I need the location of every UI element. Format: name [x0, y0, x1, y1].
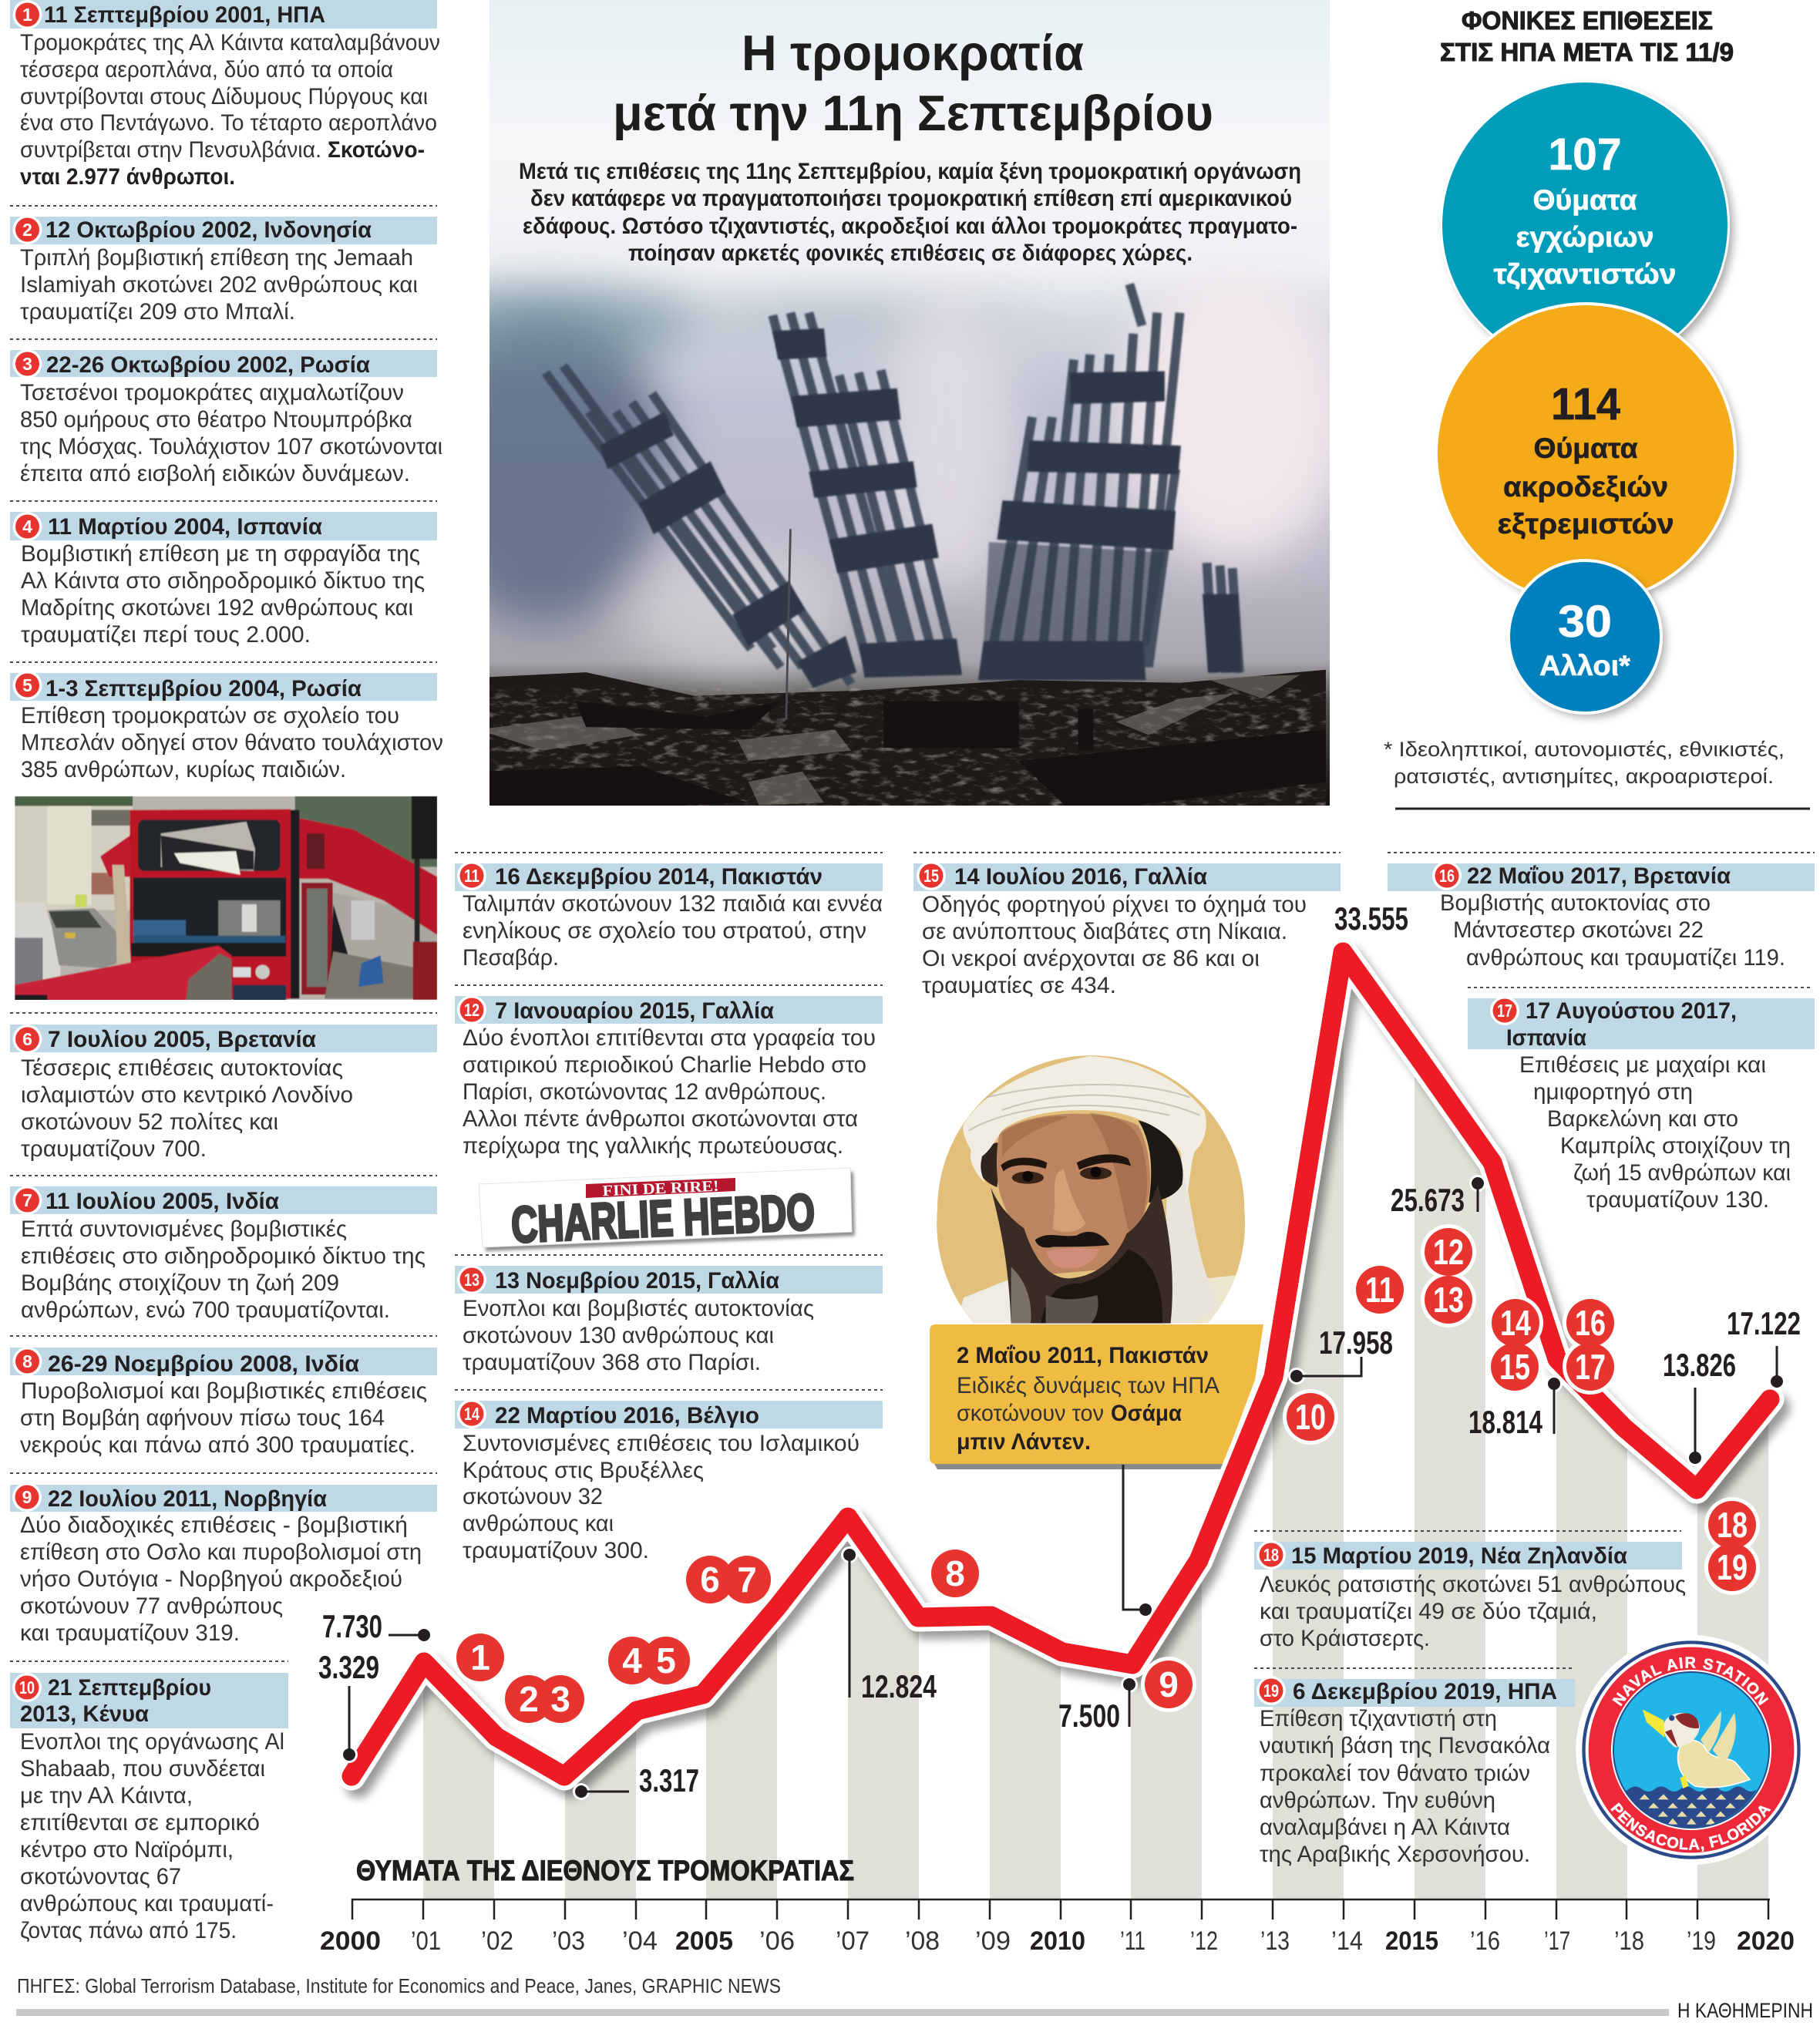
panel: event 15 [913, 861, 1341, 998]
panel: event 10: με την Αλ Κάιντα, [20, 1783, 193, 1809]
panel: event 7: επιθέσεις στο σιδηροδρομικό δίκτυο της [21, 1243, 426, 1269]
panel: event 10: Ενοπλοι της οργάνωσης Al [20, 1729, 284, 1755]
panel: event 11 [455, 861, 883, 971]
panel: event 5: Μπεσλάν οδηγεί στον θάνατο τουλάχιστον [21, 730, 443, 755]
panel: event 15: Οι νεκροί ανέρχονται σε 86 και οι [922, 946, 1260, 971]
panel: event 11: Πεσαβάρ. [463, 945, 559, 971]
panel: event 19: 6 Δεκεμβρίου 2019, ΗΠΑ [1293, 1679, 1557, 1704]
data labels and leader lines: 25.673 [1391, 1182, 1465, 1218]
panel: event 7: Επτά συντονισμένες βομβιστικές [21, 1216, 347, 1242]
axis year labels [320, 1926, 1795, 1956]
panel: event 6 [10, 1025, 437, 1162]
panel: event 4: Αλ Κάιντα στο σιδηροδρομικό δίκτυο της [21, 568, 425, 594]
logo: Charlie Hebdo: FINI DE RIRE! [602, 1178, 719, 1200]
panel: event 18: Λευκός ρατσιστής σκοτώνει 51 ανθρώπους [1260, 1572, 1686, 1597]
circle: 30 other: 30 [1558, 597, 1612, 647]
panel: event 7: Βομβάης στοιχίζουν τη ζωή 209 [21, 1270, 339, 1296]
panel: event 1: συντρίβονται στους Δίδυμους Πύργους και [20, 84, 428, 109]
panel: event 9: 22 Ιουλίου 2011, Νορβηγία [48, 1486, 328, 1512]
panel: event 1: νται 2.977 άνθρωποι. [20, 164, 235, 190]
icon: Naval Air Station Pensacola emblem [1576, 1635, 1801, 1865]
panel: event 13: 13 Νοεμβρίου 2015, Γαλλία [495, 1268, 780, 1294]
panel: event 13: τραυματίζουν 368 στο Παρίσι. [463, 1350, 761, 1375]
panel: hero photo of ruins with title [397, 0, 1354, 813]
panel: event 16: ανθρώπους και τραυματίζει 119. [1466, 945, 1785, 971]
panel: event 14: Συντονισμένες επιθέσεις του Ισλαμικού [463, 1431, 860, 1456]
heading: main title: μετά την 11η Σεπτεμβρίου [613, 85, 1213, 141]
panel: event 16: 16 [1439, 866, 1455, 886]
panel: event 6: 6 [22, 1029, 32, 1049]
panel: event 9 [10, 1482, 437, 1646]
panel: event 2 [10, 215, 437, 325]
chart event number badges [452, 1224, 1760, 1727]
panel: event 8: 26-29 Νοεμβρίου 2008, Ινδία [48, 1351, 360, 1377]
chart event number badges: 5 [656, 1640, 676, 1681]
panel: event 15: τραυματίες σε 434. [922, 973, 1116, 998]
axis year labels: 2010 [1030, 1926, 1085, 1956]
panel: event 4: 4 [22, 517, 32, 537]
data labels and leader lines [318, 900, 1801, 1800]
chart event number badges: 2 [519, 1679, 539, 1719]
text block: intro: Μετά τις επιθέσεις της 11ης Σεπτεμβρίου, καμία ξένη τρομοκρατική οργάνωση [519, 159, 1301, 184]
panel: event 7 [10, 1186, 437, 1323]
chart event number badges: 8 [945, 1553, 965, 1593]
data labels and leader lines: 12.824 [861, 1668, 937, 1704]
panel: event 3: 850 ομήρους στο θέατρο Ντουμπρόβκα [20, 407, 412, 432]
sub-heading [1440, 6, 1734, 66]
sub-heading: ΣΤΙΣ ΗΠΑ ΜΕΤΑ ΤΙΣ 11/9 [1440, 38, 1734, 66]
panel: event 6: σκοτώνουν 52 πολίτες και [21, 1109, 278, 1135]
panel: event 3: Τσετσένοι τρομοκράτες αιχμαλωτίζουν [20, 380, 404, 405]
panel: event 17: Βαρκελώνη και στο [1547, 1106, 1738, 1132]
circle: 107 jihadist victims: 107 [1548, 130, 1622, 180]
panel: event 18 [1254, 1540, 1686, 1651]
panel: event 8: νεκρούς και πάνω από 300 τραυματίες. [20, 1432, 415, 1458]
panel: event 10 [10, 1673, 288, 1943]
photo: bombed London bus [15, 796, 437, 1001]
panel: event 1: Τρομοκράτες της Αλ Κάιντα καταλαμβάνουν [20, 30, 440, 56]
panel: event 18: στο Κράιστσερτς. [1260, 1626, 1430, 1651]
panel: event 17: ζωή 15 ανθρώπων και [1573, 1160, 1791, 1186]
circle: 107 jihadist victims: Θύματα [1532, 184, 1637, 216]
panel: deadly attacks in the USA after 9/11 [1384, 6, 1810, 809]
panel: event 12: Αλλοι πέντε άνθρωποι σκοτώνονται στα [463, 1106, 858, 1132]
axis year labels: ’06 [759, 1926, 795, 1956]
panel: event 2: τραυματίζει 209 στο Μπαλί. [20, 299, 295, 325]
chart event number badges: 18 [1717, 1505, 1748, 1545]
panel: event 19: ναυτική βάση της Πενσακόλα [1260, 1733, 1550, 1758]
panel: event 19: αναλαμβάνει η Αλ Κάιντα [1260, 1815, 1510, 1840]
axis year labels: ’13 [1260, 1926, 1290, 1956]
circle: 114 far-right victims: Θύματα [1534, 432, 1638, 464]
axis year labels: ’11 [1120, 1926, 1145, 1956]
panel: event 19: προκαλεί τον θάνατο τριών [1260, 1761, 1530, 1786]
panel: event 12 [455, 995, 883, 1159]
panel: event 5: 1-3 Σεπτεμβρίου 2004, Ρωσία [45, 676, 362, 702]
panel: event 18: 15 Μαρτίου 2019, Νέα Ζηλανδία [1291, 1543, 1628, 1569]
chart event number badges: 16 [1575, 1303, 1606, 1343]
circle: 30 other [1507, 559, 1665, 717]
callout: Osama bin Laden killed: μπιν Λάντεν. [957, 1429, 1091, 1455]
panel: event 15: Οδηγός φορτηγού ρίχνει το όχημά του [922, 892, 1307, 917]
data labels and leader lines: 18.814 [1468, 1404, 1542, 1440]
panel: event 6: τραυματίζουν 700. [21, 1136, 207, 1162]
panel: event 19: Επίθεση τζιχαντιστή στη [1260, 1706, 1497, 1731]
panel: event 14: τραυματίζουν 300. [463, 1538, 649, 1563]
data labels and leader lines: 13.826 [1663, 1347, 1736, 1383]
panel: event 7: 11 Ιουλίου 2005, Ινδία [45, 1189, 280, 1214]
chart event number badges: 13 [1433, 1280, 1464, 1320]
panel: event 17: 17 Αυγούστου 2017, [1526, 998, 1737, 1024]
axis year labels: ’02 [481, 1926, 513, 1956]
panel: event 3: έπειτα από εισβολή ειδικών δυνάμεων. [20, 461, 410, 486]
panel: event 14: ανθρώπους και [463, 1511, 614, 1536]
callout: Osama bin Laden killed: Οσάμα [1111, 1401, 1182, 1426]
panel: event 10: Shabaab, που συνδέεται [20, 1756, 265, 1782]
callout: Osama bin Laden killed: Ειδικές δυνάμεις των ΗΠΑ [957, 1373, 1220, 1398]
data labels and leader lines: 7.730 [322, 1608, 382, 1644]
panel: event 3: 3 [22, 354, 32, 374]
text block: intro: δεν κατάφερε να πραγματοποιήσει τρομοκρατική επίθεση επί αμερικανικού [530, 186, 1292, 211]
panel: event 12: 7 Ιανουαρίου 2015, Γαλλία [495, 998, 775, 1024]
panel: event 17: τραυματίζουν 130. [1586, 1187, 1769, 1213]
callout: Osama bin Laden killed: 2 Μαΐου 2011, Πακιστάν [957, 1343, 1209, 1368]
panel: event 7: ανθρώπων, ενώ 700 τραυματίζονται. [21, 1297, 390, 1323]
panel: event 17: Καμπρίλς στοιχίζουν τη [1560, 1133, 1791, 1159]
panel: event 10: 2013, Κένυα [20, 1701, 150, 1727]
chart event number badges: 1 [470, 1637, 490, 1677]
axis year labels: ’01 [411, 1926, 441, 1956]
footnote: * Ιδεοληπτικοί, αυτονομιστές, εθνικιστές, [1384, 738, 1785, 761]
panel: event 4: Βομβιστική επίθεση με τη σφραγίδα της [21, 541, 420, 567]
chart: victims of international terrorism [320, 925, 1795, 1956]
data labels and leader lines: 3.329 [318, 1649, 379, 1685]
panel: event 1: συντρίβεται στην Πενσυλβάνια. [20, 137, 321, 163]
panel: event 14 [455, 1399, 883, 1563]
panel: event 12: 12 [464, 1000, 479, 1020]
panel: event 15: 15 [923, 866, 939, 886]
panel: event 17: Επιθέσεις με μαχαίρι και [1519, 1052, 1766, 1078]
panel: event 13: σκοτώνουν 130 ανθρώπους και [463, 1323, 774, 1348]
text block: intro [519, 159, 1301, 266]
panel: event 12: περίχωρα της γαλλικής πρωτεύουσας. [463, 1133, 843, 1159]
chart event number badges: 4 [622, 1640, 642, 1681]
panel: event 1: 1 [22, 5, 32, 25]
panel: event 10: επιτίθενται σε εμπορικό [20, 1810, 260, 1836]
panel: event 13: Ενοπλοι και βομβιστές αυτοκτονίας [463, 1296, 814, 1321]
chart event number badges: 19 [1717, 1547, 1748, 1587]
chart event number badges: 3 [550, 1679, 570, 1719]
axis year labels: ’16 [1470, 1926, 1500, 1956]
panel: event 18: και τραυματίζει 49 σε δύο τζαμιά, [1260, 1599, 1597, 1624]
text block: intro: ποίησαν αρκετές φονικές επιθέσεις σε διάφορες χώρες. [628, 241, 1193, 266]
panel: event 16 [1388, 861, 1815, 971]
panel: event 18: 18 [1263, 1545, 1279, 1565]
panel: event 14: σκοτώνουν 32 [463, 1484, 603, 1509]
callout: Osama bin Laden killed: σκοτώνουν τον [957, 1401, 1104, 1426]
panel: event 6: 7 Ιουλίου 2005, Βρετανία [48, 1027, 317, 1052]
data labels and leader lines: 33.555 [1334, 900, 1408, 937]
panel: event 9: νήσο Ουτόγια - Νορβηγού ακροδεξιού [20, 1566, 402, 1592]
panel: event 3: της Μόσχας. Τουλάχιστον 107 σκοτώνονται [20, 434, 442, 459]
panel: event 4 [10, 512, 437, 648]
panel: event 11: ενηλίκους σε σχολείο του στρατού, στην [463, 918, 866, 944]
axis year labels: ’09 [975, 1926, 1011, 1956]
panel: event 7: 7 [22, 1190, 32, 1210]
axis year labels: 2020 [1737, 1926, 1795, 1956]
panel: event 11: 16 Δεκεμβρίου 2014, Πακιστάν [495, 864, 823, 890]
heading: main title: Η τρομοκρατία [742, 25, 1084, 81]
axis year labels: ’08 [905, 1926, 940, 1956]
panel: event 12: σατιρικού περιοδικού Charlie Hebdo στο [463, 1052, 866, 1078]
text block: intro: εδάφους. Ωστόσο τζιχαντιστές, ακροδεξιοί και άλλοι τρομοκράτες πραγματο- [523, 214, 1297, 239]
chart event number badges: 12 [1433, 1232, 1464, 1272]
panel: event 6: Τέσσερις επιθέσεις αυτοκτονίας [21, 1055, 343, 1081]
axis year labels: ’12 [1190, 1926, 1218, 1956]
panel: event 15: σε ανύποπτους διαβάτες στη Νίκαια. [922, 919, 1287, 944]
axis year labels: ’04 [622, 1926, 658, 1956]
panel: event 5: Επίθεση τρομοκρατών σε σχολείο του [21, 703, 399, 728]
panel: event 1: τέσσερα αεροπλάνα, δύο από τα οποία [20, 57, 393, 82]
chart event number badges: 17 [1575, 1347, 1606, 1387]
logo: Charlie Hebdo [479, 1168, 855, 1253]
panel: event 8: Πυροβολισμοί και βομβιστικές επιθέσεις [21, 1378, 427, 1404]
panel: event 4: Μαδρίτης σκοτώνει 192 ανθρώπους και [21, 595, 413, 621]
circle: 107 jihadist victims: τζιχαντιστών [1494, 258, 1676, 290]
axis year labels: 2000 [320, 1926, 381, 1956]
panel: event 11: Ταλιμπάν σκοτώνουν 132 παιδιά και εννέα [463, 891, 883, 917]
chart axis [352, 1899, 1770, 1920]
panel: event 12: Δύο ένοπλοι επιτίθενται στα γραφεία του [463, 1025, 876, 1051]
panel: event 19 [1254, 1676, 1575, 1867]
circle: 114 far-right victims: 114 [1551, 379, 1620, 429]
panel: event 4: τραυματίζει περί τους 2.000. [21, 622, 311, 648]
panel: event 19: ανθρώπων. Την ευθύνη [1260, 1788, 1495, 1813]
panel: event 14: 14 [464, 1404, 479, 1424]
panel: event 1: 11 Σεπτεμβρίου 2001, ΗΠΑ [44, 2, 325, 28]
axis year labels: ’19 [1687, 1926, 1716, 1956]
panel: event 9: 9 [22, 1487, 32, 1507]
panel: event 19: 19 [1263, 1681, 1279, 1701]
chart event number badges: 9 [1159, 1664, 1179, 1704]
data labels and leader lines: 3.317 [639, 1762, 699, 1799]
sub-heading: ΦΟΝΙΚΕΣ ΕΠΙΘΕΣΕΙΣ [1462, 6, 1713, 35]
panel: event 3 [10, 349, 442, 486]
chart line: victims per year [352, 952, 1777, 1785]
panel: event 10: 21 Σεπτεμβρίου [48, 1675, 211, 1701]
panel: event 12: Παρίσι, σκοτώνοντας 12 ανθρώπους. [463, 1079, 826, 1105]
logo: Charlie Hebdo: CHARLIE HEBDO [510, 1183, 816, 1253]
panel: event 2: 2 [22, 220, 32, 240]
chart heading: ΘΥΜΑΤΑ ΤΗΣ ΔΙΕΘΝΟΥΣ ΤΡΟΜΟΚΡΑΤΙΑΣ [356, 1855, 854, 1886]
chart event number badges: 10 [1295, 1397, 1326, 1437]
circle: 30 other: Αλλοι* [1539, 650, 1631, 681]
panel: event 2: 12 Οκτωβρίου 2002, Ινδονησία [45, 217, 372, 243]
panel: event 5 [10, 671, 443, 782]
source note: ΠΗΓΕΣ: Global Terrorism Database, Institute for Economics and Peace, Janes, GRAPHIC NEWS [17, 1974, 781, 1997]
heading: main title [613, 25, 1213, 141]
icon: Naval Air Station Pensacola emblem: NAVAL AIR STATION [1612, 1657, 1768, 1707]
chart event number badges: 14 [1500, 1303, 1531, 1343]
axis year labels: ’14 [1331, 1926, 1363, 1956]
panel: event 6: ισλαμιστών στο κεντρικό Λονδίνο [21, 1082, 353, 1108]
panel: event 17: ημιφορτηγό στη [1533, 1079, 1693, 1105]
panel: event 5: 385 ανθρώπων, κυρίως παιδιών. [21, 757, 346, 782]
footnote: ρατσιστές, αντισημίτες, ακροαριστεροί. [1394, 765, 1774, 788]
callout: Osama bin Laden killed [930, 1324, 1263, 1469]
panel: event 1: Σκοτώνο- [328, 137, 425, 163]
axis year labels: ’17 [1544, 1926, 1570, 1956]
circle: 107 jihadist victims: εγχώριων [1516, 221, 1654, 253]
panel: event 14: 22 Μαρτίου 2016, Βέλγιο [495, 1403, 759, 1428]
chart event number badges: 6 [700, 1560, 720, 1600]
panel: event 9: σκοτώνουν 77 ανθρώπους [20, 1593, 283, 1619]
panel: event 17: 17 [1497, 1001, 1512, 1021]
circle: 114 far-right victims [1435, 302, 1738, 606]
panel: event 19: της Αραβικής Χερσονήσου. [1260, 1842, 1530, 1867]
panel: event 10: σκοτώνοντας 67 [20, 1864, 181, 1889]
panel: event 8 [10, 1347, 437, 1458]
data labels and leader lines: 7.500 [1058, 1698, 1120, 1734]
panel: event 16: 22 Μαΐου 2017, Βρετανία [1467, 863, 1731, 889]
panel: event 8: στη Βομβάη αφήνουν πίσω τους 164 [20, 1405, 385, 1431]
panel: event 4: 11 Μαρτίου 2004, Ισπανία [48, 514, 323, 540]
panel: event 9: και τραυματίζουν 319. [20, 1620, 240, 1646]
photo: Osama bin Laden portrait [935, 1054, 1246, 1326]
panel: event 5: 5 [22, 675, 32, 695]
axis year labels: ’03 [552, 1926, 585, 1956]
panel: event 10: ανθρώπους και τραυματί- [20, 1891, 274, 1916]
panel: event 13: 13 [464, 1270, 479, 1290]
panel: event 8: 8 [22, 1351, 32, 1371]
icon: Naval Air Station Pensacola emblem: PENSACOLA, FLORIDA [1610, 1802, 1771, 1852]
panel: event 1 [10, 0, 440, 190]
chart event number badges: 15 [1499, 1347, 1530, 1387]
panel: event 17: Ισπανία [1506, 1025, 1587, 1051]
panel: event 9: Δύο διαδοχικές επιθέσεις - βομβιστική [20, 1512, 408, 1538]
circle: 107 jihadist victims [1440, 80, 1733, 373]
axis year labels: ’07 [836, 1926, 870, 1956]
panel: event 10: κέντρο στο Ναϊρόμπι, [20, 1837, 234, 1862]
chart event number badges: 7 [737, 1560, 757, 1600]
panel: event 13 [455, 1265, 883, 1375]
panel: event 16: Βομβιστής αυτοκτονίας στο [1440, 890, 1711, 916]
panel: event 14: Κράτους στις Βρυξέλλες [463, 1458, 704, 1483]
chart event number badges: 11 [1365, 1270, 1394, 1310]
panel: event 15: 14 Ιουλίου 2016, Γαλλία [954, 864, 1208, 890]
panel: event 1: ένα στο Πεντάγωνο. Το τέταρτο αεροπλάνο [20, 110, 437, 136]
axis year labels: ’18 [1614, 1926, 1644, 1956]
panel: event 10: ζοντας πάνω από 175. [20, 1918, 237, 1943]
panel: event 11: 11 [464, 866, 479, 886]
data labels and leader lines: 17.958 [1319, 1324, 1393, 1361]
panel: event 17 [1468, 996, 1815, 1213]
axis year labels: 2015 [1385, 1926, 1438, 1956]
panel: event 9: επίθεση στο Οσλο και πυροβολισμοί στη [20, 1539, 422, 1565]
circle: 114 far-right victims: εξτρεμιστών [1497, 508, 1674, 540]
panel: event 16: Μάντσεστερ σκοτώνει 22 [1453, 917, 1704, 943]
axis year labels: 2005 [675, 1926, 733, 1956]
panel: event 2: Τριπλή βομβιστική επίθεση της Jemaah [20, 245, 413, 271]
chart stripes [423, 1036, 1768, 1899]
circle: 114 far-right victims: ακροδεξιών [1503, 471, 1668, 503]
panel: event 10: 10 [19, 1677, 35, 1698]
panel: event 2: Islamiyah σκοτώνει 202 ανθρώπους και [20, 272, 418, 298]
footnote [1384, 738, 1785, 788]
panel: event 3: 22-26 Οκτωβρίου 2002, Ρωσία [46, 352, 371, 378]
